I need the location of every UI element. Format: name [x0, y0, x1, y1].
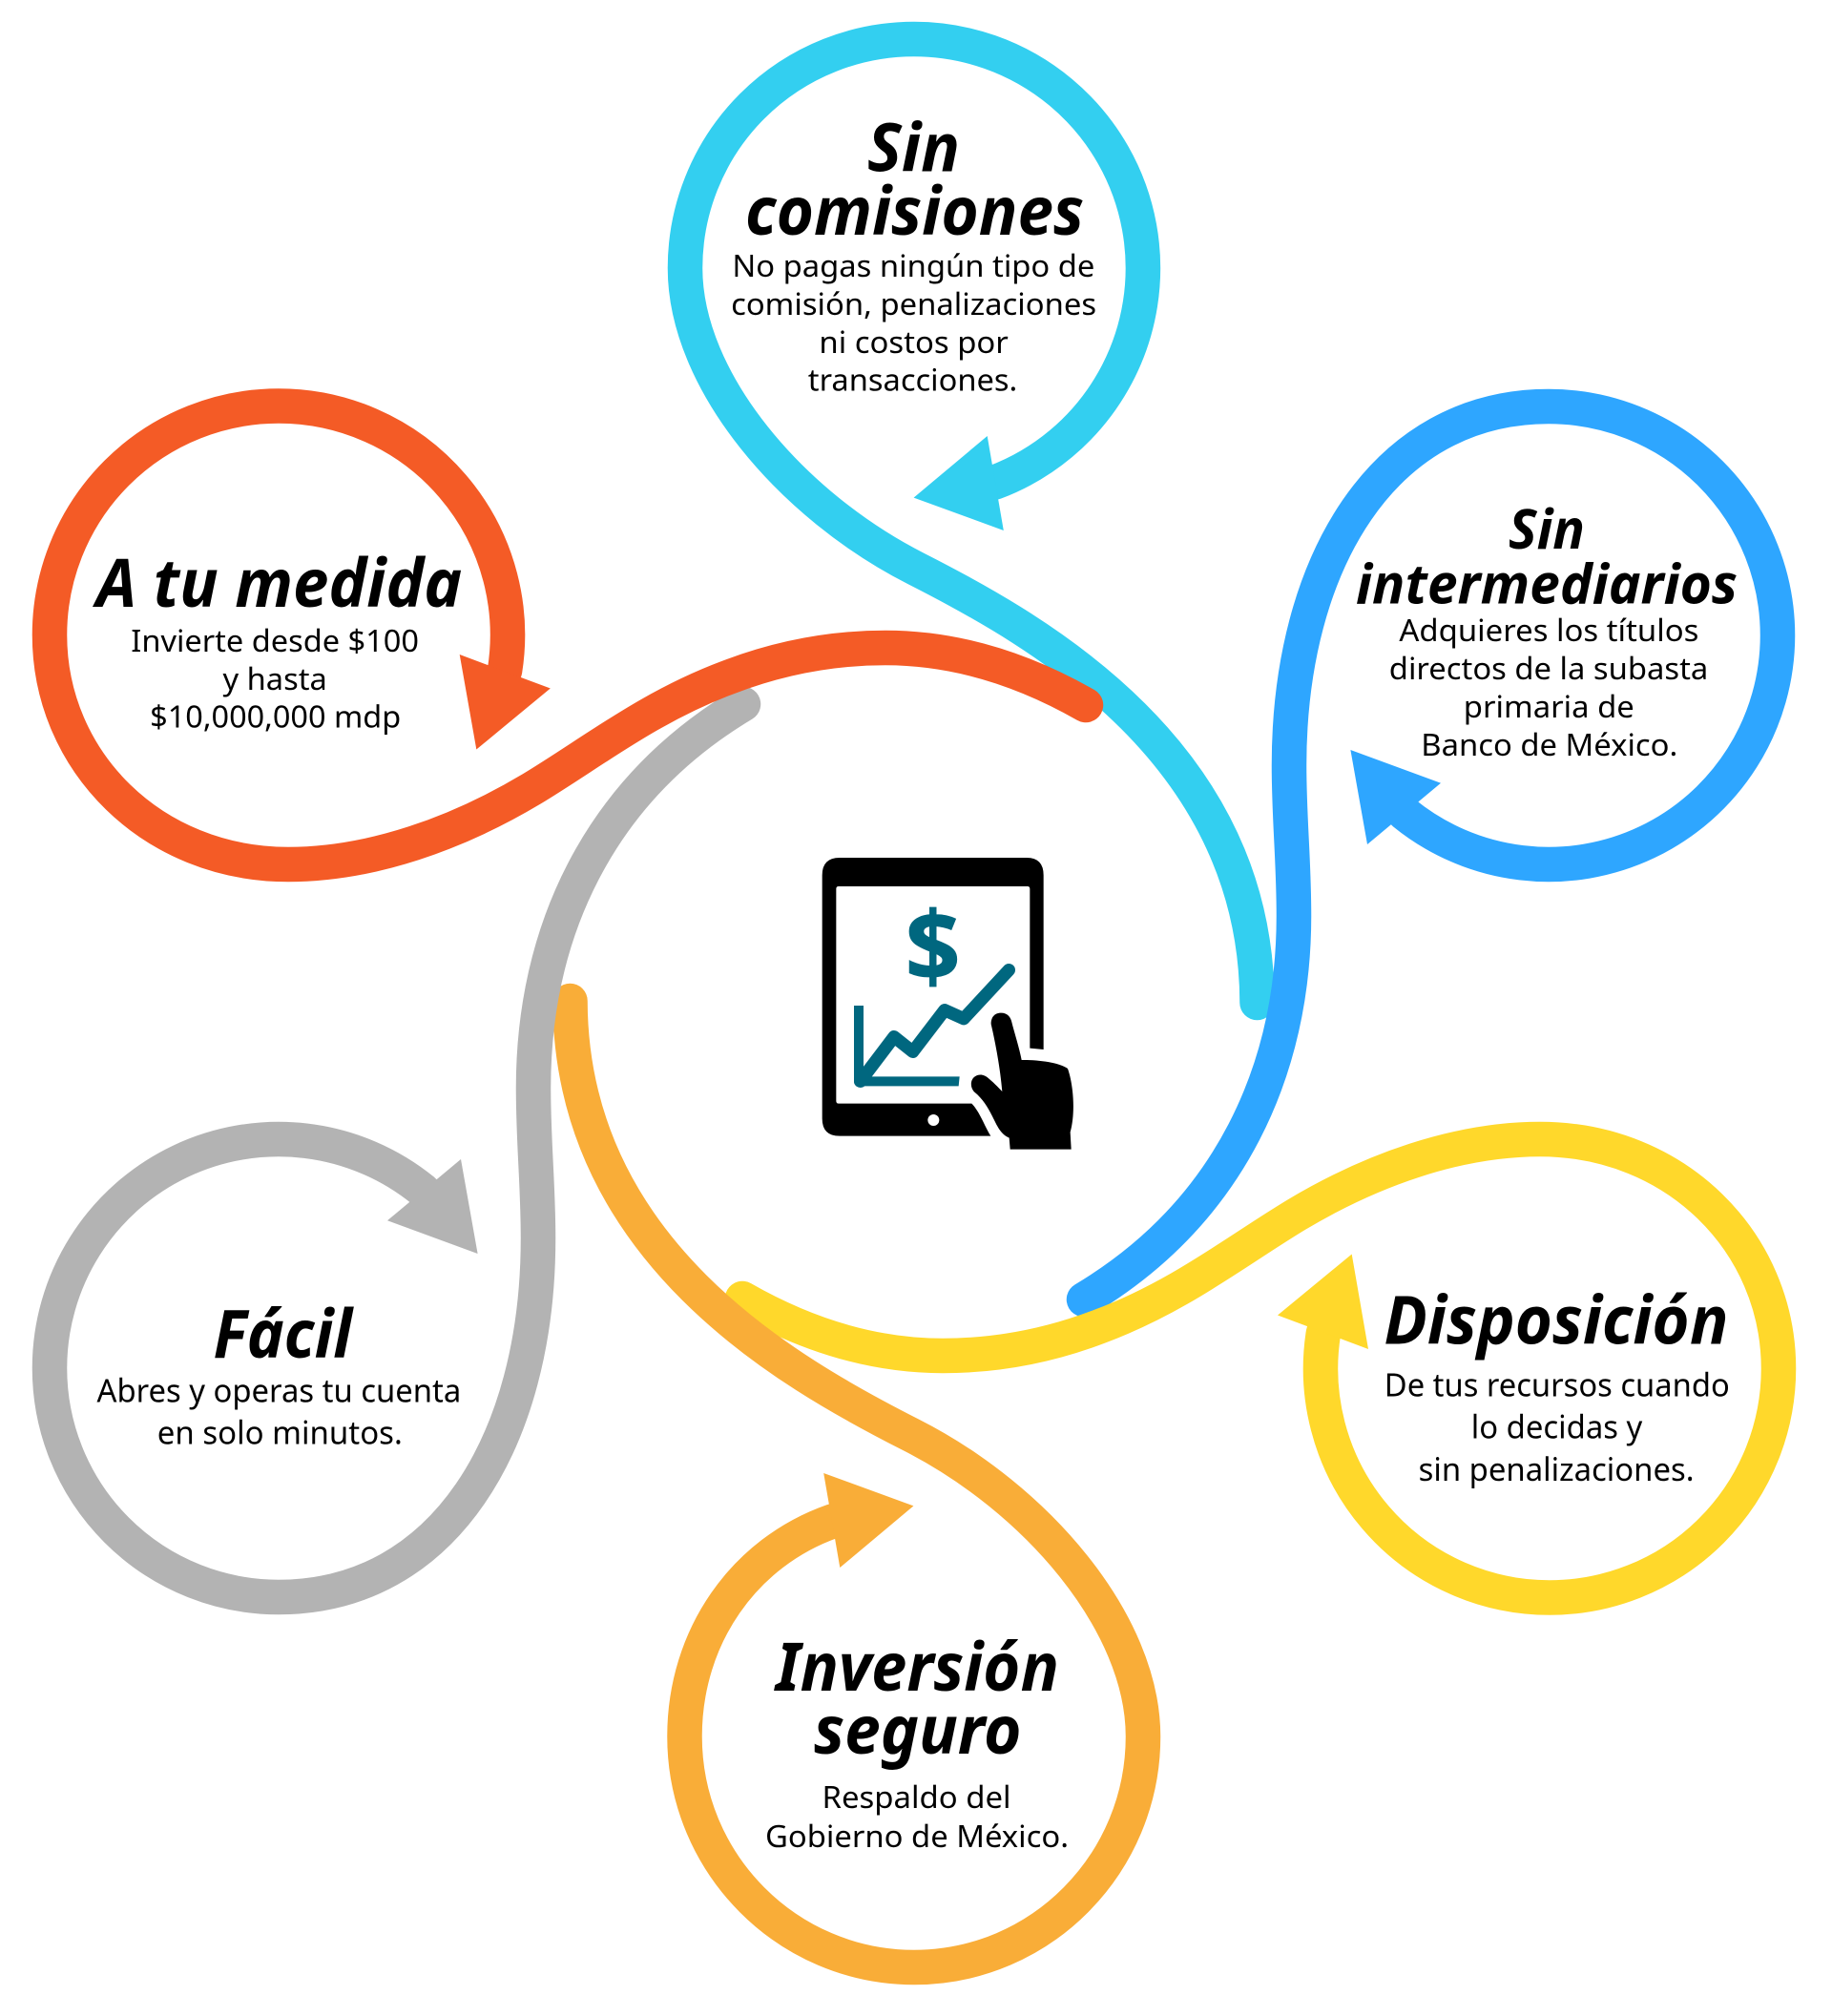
heading: Sin comisiones: [745, 100, 1084, 255]
heading: Sin intermediarios: Sin: [1509, 490, 1585, 565]
arrowhead: orange: [823, 1473, 913, 1568]
panel: Sin comisiones: [685, 39, 1258, 1003]
heading: Fácil: Fácil: [214, 1286, 354, 1378]
text: Fácil description: en solo minutos.: [157, 1410, 403, 1454]
icon: home button: [927, 1114, 939, 1126]
panel: Fácil: [50, 704, 743, 1597]
text: Sin comisiones description: comisión, penalizaciones: [731, 283, 1096, 324]
text: Inversión seguro description: [765, 1777, 1069, 1857]
ribbon: orange loop: [571, 1001, 1143, 1967]
text: Sin comisiones description: transacciones.: [808, 359, 1017, 401]
arrowhead: cyan: [914, 436, 1004, 530]
text: Inversión seguro description: Respaldo del: [822, 1777, 1011, 1818]
heading: Sin comisiones: comisiones: [745, 163, 1084, 255]
arrowhead: blue: [1350, 750, 1441, 844]
icon: tablet body: [822, 858, 1044, 1136]
text: Disposición description: [1384, 1362, 1730, 1490]
heading: Disposición: Disposición: [1384, 1272, 1729, 1363]
heading: Sin comisiones: Sin: [867, 100, 960, 192]
ribbon: gray loop: [50, 704, 743, 1597]
text: Sin intermediarios description: Adquieres los títulos: [1399, 610, 1698, 651]
text: Fácil description: Abres y operas tu cuenta: [97, 1368, 461, 1412]
heading: Inversión seguro: [773, 1619, 1059, 1774]
text: Sin intermediarios description: [1389, 610, 1708, 765]
text: Sin intermediarios description: Banco de México.: [1421, 724, 1677, 765]
text: Sin intermediarios description: primaria de: [1464, 686, 1634, 727]
heading: Sin intermediarios: [1356, 490, 1738, 619]
heading: Inversión seguro: seguro: [814, 1682, 1021, 1774]
icon: pointing hand: [971, 1013, 1073, 1150]
panel: Inversión seguro: [571, 1001, 1143, 1967]
ribbon: yellow loop: [742, 1139, 1779, 1597]
text: Fácil description: [97, 1368, 461, 1454]
icon: chart axes: [854, 1006, 960, 1086]
panel: Sin intermediarios: [1084, 406, 1778, 1299]
text: A tu medida description: $10,000,000 mdp: [150, 696, 401, 738]
text: Disposición description: lo decidas y: [1471, 1404, 1643, 1448]
text: Disposición description: De tus recursos cuando: [1384, 1362, 1730, 1406]
arrowhead: yellow: [1278, 1254, 1368, 1349]
text: Sin comisiones description: No pagas ningún tipo de: [732, 245, 1094, 286]
text: A tu medida description: y hasta: [223, 658, 327, 699]
panel: A tu medida: [50, 406, 1086, 864]
arrowhead: red-orange: [460, 655, 551, 750]
heading: A tu medida: A tu medida: [92, 535, 462, 627]
ribbon: blue loop: [1084, 406, 1778, 1299]
panel: Disposición: [742, 1139, 1779, 1597]
text: A tu medida description: Invierte desde $100: [131, 620, 419, 661]
heading: Inversión seguro: Inversión: [773, 1619, 1059, 1711]
text: Disposición description: sin penalizaciones.: [1419, 1446, 1695, 1490]
icon: tablet with chart and pointing hand: [822, 858, 1073, 1150]
text: Sin comisiones description: [731, 245, 1096, 401]
icon: chart trend line: [861, 970, 1009, 1081]
icon: dollar sign: $: [906, 877, 961, 1009]
text: Sin comisiones description: ni costos por: [819, 322, 1009, 363]
arrowhead: gray: [387, 1159, 478, 1254]
heading: Sin intermediarios: intermediarios: [1356, 545, 1738, 619]
ribbon: cyan loop: [685, 39, 1258, 1003]
text: Inversión seguro description: Gobierno de México.: [765, 1816, 1069, 1857]
text: A tu medida description: [131, 620, 419, 738]
text: Sin intermediarios description: directos de la subasta: [1389, 648, 1708, 689]
ribbon: red-orange loop: [50, 406, 1086, 864]
